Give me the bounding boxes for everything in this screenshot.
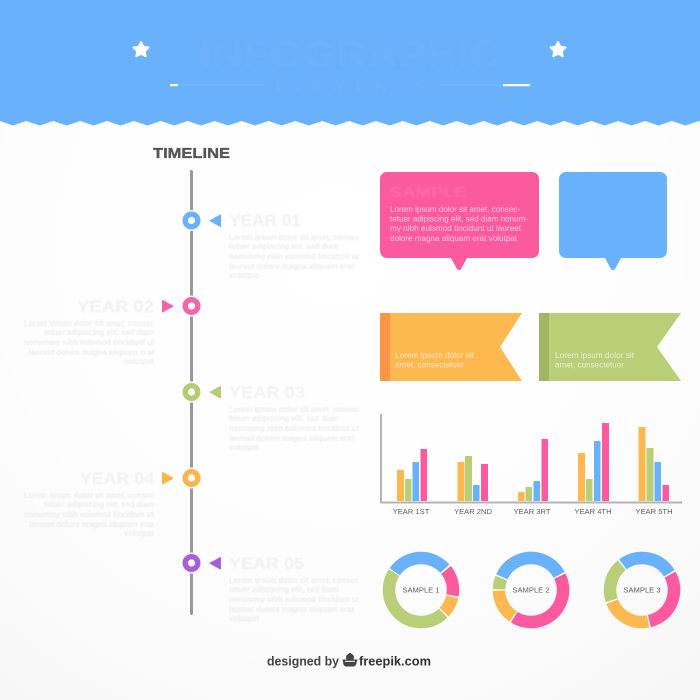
milestone: year 04 (24, 468, 202, 538)
milestone: year 05: Lorem ipsum dolor sit amet, consec (229, 575, 359, 585)
milestone: year 04: volutpat (124, 528, 154, 538)
donut: sample 1: SAMPLE 1 (402, 586, 440, 594)
panel: green ribbon (539, 313, 681, 381)
donut: sample 3 (597, 545, 687, 635)
donut: sample 3: SAMPLE 3 (623, 586, 661, 594)
milestone: year 03: laoreet dolore magna aliquam erat (229, 433, 354, 443)
milestone: year 04: tetuer adipiscing elit, sed diam (44, 499, 154, 509)
milestone: year 04: nonummy nibh euismod tincidunt ut (24, 509, 154, 519)
milestone: year 05: YEAR 05 (229, 554, 304, 573)
timeline (24, 170, 359, 623)
milestone: year 05: volutpat (229, 613, 259, 623)
milestone: year 03: YEAR 03 (229, 383, 305, 402)
milestone: year 02: volutpat (124, 356, 154, 366)
bars: year 1st (393, 449, 430, 516)
panel: blue speech bubble (559, 172, 667, 270)
bars: year 5th: YEAR 5TH (635, 507, 673, 516)
milestone: year 04: Lorem ipsum dolor sit amet, consec (24, 490, 154, 500)
milestone: year 02: Lorem ipsum dolor sit amet, consec (24, 318, 154, 328)
bars: year 5th (635, 427, 673, 516)
panel: pink speech bubble: dolore magna aliquam erat volutpat (390, 233, 518, 243)
milestone: year 02 (24, 296, 202, 366)
donut: sample 2: SAMPLE 2 (512, 586, 550, 594)
milestone: year 02: nonummy nibh euismod tincidunt ut (24, 337, 154, 347)
milestone: year 05: nonummy nibh euismod tincidunt ut (229, 594, 359, 604)
footer credit: freepik.com (359, 654, 431, 668)
panel: orange ribbon: amet, consectetuer (395, 360, 464, 370)
icon: freepik logo (342, 653, 358, 667)
milestone: year 05: laoreet dolore magna aliquam erat (229, 604, 354, 614)
bars: year 1st: YEAR 1ST (393, 507, 430, 516)
milestone: year 03: Lorem ipsum dolor sit amet, consec (229, 404, 359, 414)
left rule (170, 84, 265, 86)
milestone: year 02: tetuer adipiscing elit, sed diam (44, 327, 154, 337)
milestone: year 01: Lorem ipsum dolor sit amet, consec (229, 232, 359, 242)
bars: year 4th: YEAR 4TH (574, 507, 612, 516)
title: INFOGRAPHIC (200, 34, 500, 76)
milestone: year 01: tetuer adipiscing elit, sed diam (229, 241, 339, 251)
milestone: year 01: YEAR 01 (229, 211, 301, 230)
panel: green ribbon: amet, consectetuer (555, 360, 624, 370)
milestone: year 01: volutpat (229, 270, 259, 280)
milestone: year 01: laoreet dolore magna aliquam erat (229, 261, 354, 271)
milestone: year 04: laoreet dolore magna aliquam erat (29, 519, 154, 529)
donut: sample 2 (487, 546, 575, 634)
header banner (0, 0, 700, 126)
panel: pink speech bubble: SAMPLE (390, 184, 467, 201)
right rule (440, 84, 530, 86)
timeline axis (190, 170, 193, 615)
milestone: year 03 (181, 382, 359, 452)
bars: year 4th (574, 423, 612, 516)
panel: orange ribbon (380, 313, 522, 381)
milestone: year 02: laoreet dolore magna aliquam erat (29, 347, 154, 357)
milestone: year 04: YEAR 04 (80, 469, 155, 488)
bar chart (381, 414, 682, 516)
donut: sample 1 (376, 545, 466, 635)
bars: year 3rt: YEAR 3RT (514, 507, 551, 516)
footer credit: designed by (267, 654, 339, 668)
milestone: year 03: nonummy nibh euismod tincidunt ut (229, 423, 359, 433)
milestone: year 03: tetuer adipiscing elit, sed diam (229, 413, 339, 423)
milestone: year 01: nonummy nibh euismod tincidunt ut (229, 251, 359, 261)
milestone: year 02: YEAR 02 (77, 297, 154, 316)
panel: green ribbon: Lorem ipsum dolor sit (555, 350, 635, 360)
subtitle: ELEMENTS (275, 77, 425, 96)
bars: year 3rt (514, 439, 551, 516)
panel: pink speech bubble: tetuer adipiscing elit, sed diam nonum- (390, 214, 528, 224)
milestone: year 03: volutpat (229, 442, 259, 452)
footer credit (267, 653, 431, 668)
panel: pink speech bubble: Lorem ipsum dolor sit amet, consec- (390, 204, 520, 214)
bars: year 2nd: YEAR 2ND (454, 507, 493, 516)
panel: orange ribbon: Lorem ipsum dolor sit (395, 350, 475, 360)
milestone: year 05: tetuer adipiscing elit, sed diam (229, 584, 339, 594)
icon: right star (550, 42, 566, 56)
milestone: year 05 (181, 552, 359, 623)
bars: year 2nd (454, 456, 493, 516)
milestone: year 01 (181, 210, 359, 280)
panel: pink speech bubble (380, 172, 539, 270)
panel: pink speech bubble: my nibh euismod tincidunt ut laoreet (390, 223, 522, 233)
icon: left star (134, 42, 148, 56)
chart axes (381, 414, 682, 502)
heading: timeline: TIMELINE (153, 145, 230, 162)
